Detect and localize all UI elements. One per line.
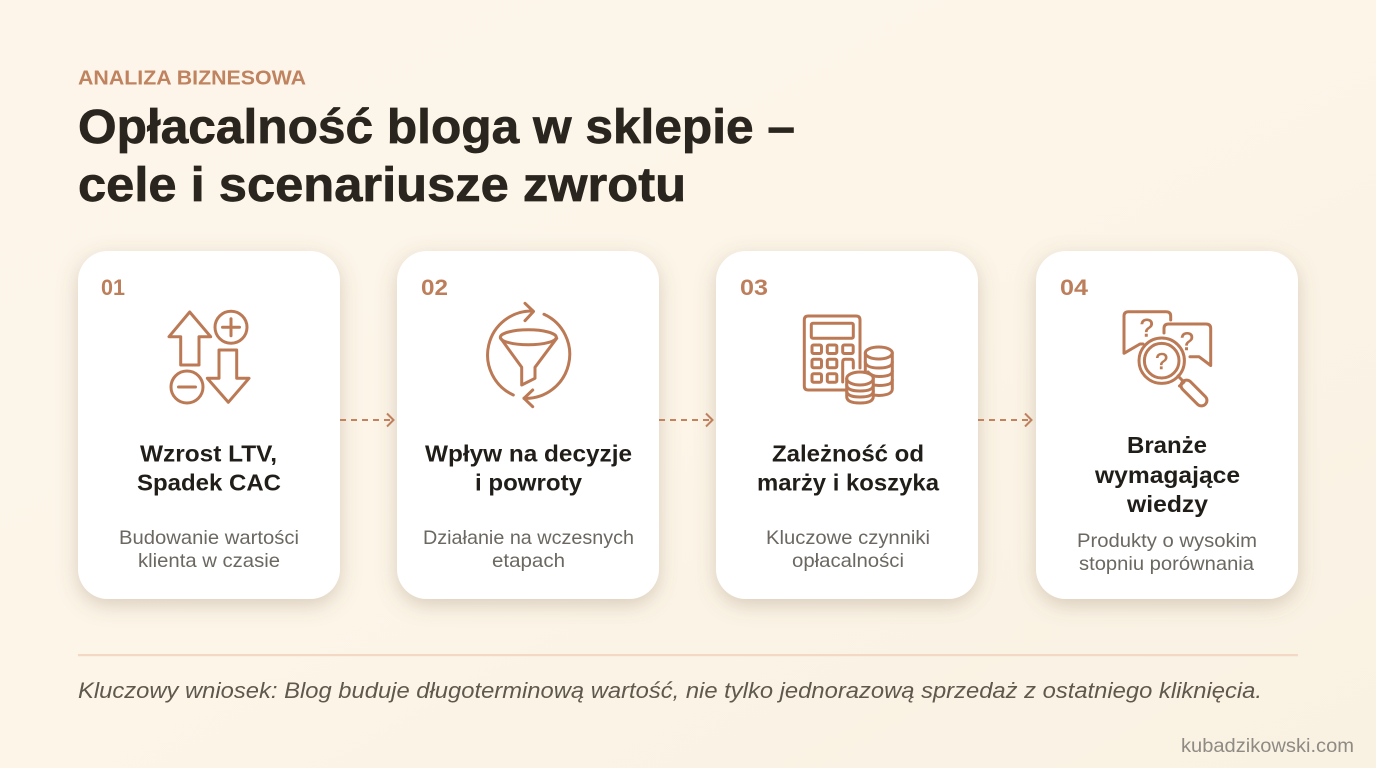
title: Opłacalność bloga w sklepie – [78, 101, 795, 154]
eyebrow label: ANALIZA BIZNESOWA [78, 68, 306, 90]
card 02 description: etapach [492, 550, 565, 572]
panel: card 03 [716, 251, 978, 599]
card 04 description: Produkty o wysokim [1077, 530, 1257, 552]
card 03 heading: Zależność od [772, 440, 924, 466]
panel: card 02 [397, 251, 659, 599]
card 01 description: Budowanie wartości [119, 527, 299, 549]
title [78, 101, 795, 212]
card 03 description [766, 527, 930, 572]
key takeaway: Kluczowy wniosek: Blog buduje długoterminową wartość, nie tylko jednorazową sprzedaż z ostatniego kliknięcia. [78, 678, 1262, 703]
card 02 description [423, 527, 634, 572]
card 03 description: Kluczowe czynniki [766, 527, 930, 549]
icon: calculator and coins [804, 316, 892, 403]
card 04 heading: Branże [1127, 432, 1207, 458]
card 04 description: stopniu porównania [1079, 553, 1254, 575]
card 01 description [119, 527, 299, 572]
card 03 description: opłacalności [792, 550, 904, 572]
icon: speech bubbles with question marks and magnifier: ? [1155, 348, 1168, 374]
icon: speech bubbles with question marks and magnifier: ? [1180, 328, 1194, 356]
card 01 description: klienta w czasie [138, 550, 280, 572]
card 04 heading [1094, 432, 1240, 517]
card 04 description [1077, 530, 1257, 575]
icon: speech bubbles with question marks and magnifier [1124, 312, 1211, 408]
title: cele i scenariusze zwrotu [78, 159, 686, 212]
card 02 description: Działanie na wczesnych [423, 527, 634, 549]
card 01 heading: Wzrost LTV, [140, 440, 277, 466]
arrow: card 01 to card 02 [340, 414, 394, 426]
panel: card 04 [1036, 251, 1298, 599]
icon: funnel in a cycle [488, 303, 570, 407]
card 02 heading: Wpływ na decyzje [425, 440, 632, 466]
icon: speech bubbles with question marks and magnifier: ? [1140, 314, 1154, 342]
card 03 number: 03 [740, 275, 768, 300]
card 03 heading: marży i koszyka [757, 470, 939, 496]
arrow: card 02 to card 03 [659, 414, 712, 426]
card 04 number: 04 [1060, 275, 1089, 300]
card 02 heading: i powroty [475, 470, 582, 496]
card 01 number: 01 [101, 275, 125, 300]
panel: card 01 [78, 251, 340, 599]
card 01 heading: Spadek CAC [137, 470, 281, 496]
card 04 heading: wymagające [1094, 462, 1240, 488]
arrow: card 03 to card 04 [978, 414, 1032, 426]
source credit: kubadzikowski.com [1181, 736, 1354, 757]
icon: arrows up and down with plus and minus [169, 311, 249, 403]
card 01 heading [137, 440, 281, 496]
card 02 number: 02 [421, 275, 448, 300]
card 02 heading [425, 440, 632, 496]
card 03 heading [757, 440, 939, 496]
card 04 heading: wiedzy [1126, 491, 1208, 517]
